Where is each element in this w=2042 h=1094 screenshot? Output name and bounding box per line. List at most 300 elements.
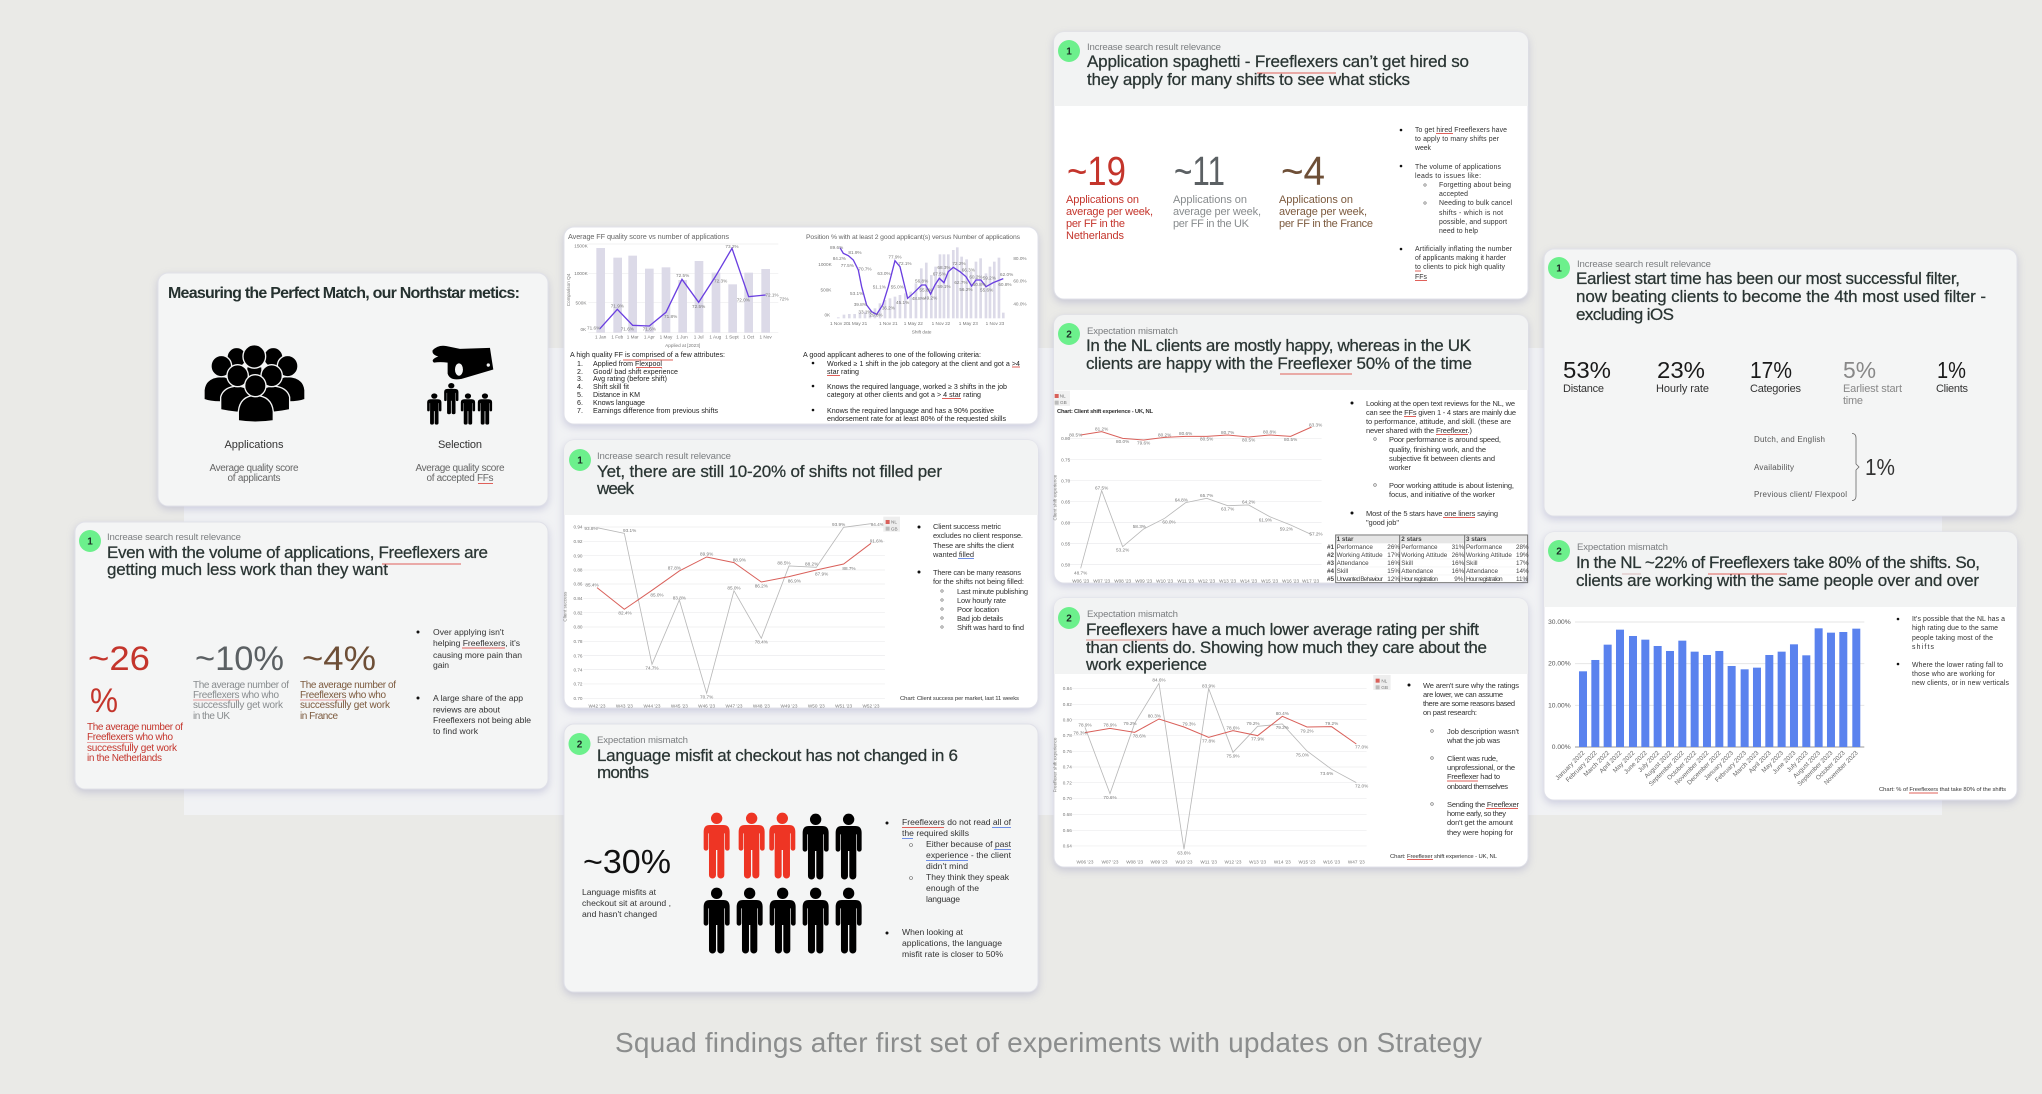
table: reasons by star rating: Skill <box>1337 568 1348 575</box>
bullets: shifts - which is not <box>1439 210 1503 217</box>
label: applications <box>210 439 299 484</box>
line chart: freeflexer shift experience: 70.6% <box>1103 795 1117 800</box>
line chart: freeflexer shift experience: 78.6% <box>1226 725 1240 730</box>
panel: freeflexer ratings <box>1053 598 1528 867</box>
stat: UK 11: per FF in the UK <box>1173 218 1250 230</box>
chart: client shift experience: 60.0% <box>1162 519 1176 524</box>
table: reasons by star rating: 14% <box>1516 568 1529 575</box>
stat: earliest start time: 5% <box>1843 357 1876 383</box>
chart: client shift experience: 0.50 <box>1061 562 1071 567</box>
chart: client shift experience: 67.5% <box>1095 486 1108 491</box>
chart: average FF quality score vs applications: 71.6% <box>587 325 600 330</box>
panel: earliest start time filter <box>1544 249 2017 516</box>
chart: client shift experience: 81.2% <box>1095 427 1108 432</box>
stat: clients: 1% <box>1937 357 1966 383</box>
text: good applicant criteria: Knows the required language, worked ≥ 3 shifts in the job <box>827 383 1007 391</box>
text: high quality FF attributes: Good/ bad shift experience <box>593 368 678 376</box>
heading: Yet, there are still 10-20% of shifts not filled per <box>597 462 942 481</box>
chart: positions with good applicants vs applications: 56.8% <box>915 278 928 283</box>
chart: average FF quality score vs applications: 1 Aug <box>709 335 722 340</box>
text: high quality FF attributes: 2. <box>577 368 583 376</box>
chart: average FF quality score vs applications: 1 Jun <box>676 335 688 340</box>
chart: average FF quality score vs applications: 71.6% <box>643 327 656 332</box>
stat: distance <box>1563 357 1611 395</box>
icon: hand selecting a person <box>427 346 493 425</box>
chart: average FF quality score vs applications: 1 Nov <box>760 335 772 340</box>
chart: client shift experience: 64.2% <box>1242 500 1255 505</box>
line chart: freeflexer shift experience: 79.2% <box>1276 725 1289 730</box>
bullets: Freeflexers do not read all of <box>902 817 1012 827</box>
category label: Increase search result relevance <box>107 532 241 543</box>
chart: positions with good applicants vs applications: 1 Nov 22 <box>932 321 951 326</box>
bullets: never shared with the Freeflexer.) <box>1366 426 1472 435</box>
table: reasons by star rating: 3 stars <box>1466 536 1487 543</box>
line chart: freeflexer shift experience: W09 '23 <box>1151 859 1168 864</box>
stat: UK 10%: The average number of <box>193 680 289 691</box>
chart: client shift experience: 0.70 <box>1061 478 1071 483</box>
chart: average FF quality score vs applications: 1 Oct <box>743 335 755 340</box>
heading: northstar metrics: Measuring the Perfect Match, our Northstar metics: <box>168 285 520 302</box>
badge 2: 2 <box>1066 614 1072 624</box>
table: reasons by star rating: 17% <box>1387 552 1400 559</box>
line chart: client success per market: 93.8% <box>584 526 598 531</box>
line chart: client success per market: Client success <box>563 591 568 622</box>
bullets: causing more pain than <box>433 650 522 660</box>
heading: they apply for many shifts to see what sticks <box>1087 70 1410 89</box>
table: reasons by star rating: Skill <box>1401 560 1413 567</box>
badge 1: 1 <box>1556 264 1562 274</box>
bullets: Bad job details <box>957 614 1003 623</box>
line chart: freeflexer shift experience: 0.76 <box>1063 749 1072 754</box>
grouped filters with bracket: Availability <box>1754 463 1794 472</box>
stat: Netherlands 19: average per week, <box>1066 206 1153 218</box>
chart: average FF quality score vs applications: Average FF quality score vs number of applications <box>568 232 729 241</box>
text: high quality FF attributes <box>570 351 725 415</box>
bar chart: share of freeflexers: December 2022 <box>1686 749 1723 787</box>
line chart: client success per market: W49 '23 <box>781 704 798 709</box>
chart: average FF quality score vs applications: 1 May <box>660 335 673 340</box>
panel: shifts not filled <box>563 440 1038 709</box>
heading <box>1087 52 1469 89</box>
stat: UK 10%: in the UK <box>193 711 230 722</box>
bullets <box>1897 616 2010 687</box>
line chart: client success per market: 87.9% <box>815 571 828 576</box>
heading <box>596 462 942 498</box>
line chart: client success per market: GB <box>891 526 898 531</box>
stat: France 4%: The average number of <box>300 680 396 691</box>
chart: client shift experience: 79.6% <box>1137 441 1150 446</box>
bar chart: share of freeflexers: October 2022 <box>1666 749 1698 782</box>
line chart: freeflexer shift experience: 78.3% <box>1073 731 1087 736</box>
text: high quality FF attributes: 1. <box>577 360 583 368</box>
table: reasons by star rating: Performance <box>1401 544 1438 551</box>
chart: average FF quality score vs applications: 1 Mar <box>627 335 639 340</box>
chart: positions with good applicants vs applications: 45.1% <box>896 300 909 305</box>
line chart: freeflexer shift experience: 78.6% <box>1133 733 1146 738</box>
bullets: of applicants making it harder <box>1415 255 1507 262</box>
text: good applicant criteria: Knows the required language and has a 90% positive <box>827 407 994 415</box>
line chart: client success per market: 86.2% <box>755 584 768 589</box>
bar chart: share of freeflexers: 10.00% <box>1548 702 1571 709</box>
chart: client shift experience: 58.3% <box>1133 524 1146 529</box>
stat: Netherlands 26%: % <box>90 682 118 720</box>
chart: average FF quality score vs applications: Comparison Q4 <box>566 273 571 306</box>
bullets <box>416 627 531 736</box>
panel: less work than wanted <box>75 522 548 789</box>
chart: client shift experience: Client shift experience <box>1053 474 1058 521</box>
stat: France 4: average per week, <box>1279 206 1367 218</box>
line chart: freeflexer shift experience: 72.0% <box>1355 783 1368 788</box>
stat: Netherlands 19: Netherlands <box>1066 230 1124 242</box>
line chart: client success per market: 94.4% <box>871 522 884 527</box>
chart: positions with good applicants vs applications: 60.2% <box>969 274 983 279</box>
chart: client shift experience: 83.3% <box>1309 422 1322 427</box>
stat: hourly rate: 23% <box>1657 357 1705 383</box>
bullets: Artificially inflating the number <box>1415 246 1513 253</box>
chart: positions with good applicants vs applications: 33.1% <box>858 309 872 314</box>
chart: client shift experience: W13 '23 <box>1219 579 1237 584</box>
chart: positions with good applicants vs applications: 80.0% <box>1013 256 1027 261</box>
bullets <box>1408 681 1520 837</box>
chart: client shift experience: 61.9% <box>1259 517 1272 522</box>
chart: average FF quality score vs applications: 1 Jul <box>694 335 704 340</box>
heading: getting much less work than they want <box>107 560 388 579</box>
table: reasons by star rating: 16% <box>1387 560 1400 567</box>
heading: clients are happy with the Freeflexer 50% of the time <box>1086 354 1472 373</box>
stat: 30%: checkout sit at around , <box>582 898 671 908</box>
chart: average FF quality score vs applications: 0K <box>580 327 587 332</box>
line chart: client success per market: 0.76 <box>573 653 583 658</box>
chart: average FF quality score vs applications <box>566 232 789 348</box>
heading: week <box>596 479 634 498</box>
bullets: Needing to bulk cancel <box>1439 200 1512 207</box>
line chart: freeflexer shift experience: GB <box>1381 685 1388 690</box>
heading: clients are working with the same people over and over <box>1576 571 1979 590</box>
line chart: client success per market: 0.80 <box>573 625 583 630</box>
table: reasons by star rating: 2 stars <box>1401 536 1422 543</box>
chart: average FF quality score vs applications: 1 Jan <box>595 335 607 340</box>
chart: average FF quality score vs applications: 1 Apr <box>644 335 655 340</box>
chart: client shift experience: 0.80 <box>1061 436 1071 441</box>
chart: client shift experience: 59.2% <box>1280 526 1293 531</box>
bar chart: share of freeflexers: July 2022 <box>1637 749 1661 774</box>
badge 1: 1 <box>1066 46 1072 58</box>
bullets: on past research: <box>1423 708 1477 717</box>
chart: client shift experience: 63.7% <box>1221 506 1234 511</box>
heading: Even with the volume of applications, Freeflexers are <box>107 543 488 562</box>
line chart: freeflexer shift experience: W16 '23 <box>1323 859 1341 864</box>
text: high quality FF attributes: Distance in KM <box>593 391 640 399</box>
line chart: freeflexer shift experience: 77.8% <box>1202 738 1215 743</box>
line chart: client success per market: 0.72 <box>573 682 583 687</box>
bar chart: share of freeflexers: 0.00% <box>1552 744 1571 751</box>
category label: Expectation mismatch <box>1087 609 1178 620</box>
stat: UK 11: Applications on <box>1173 194 1247 206</box>
heading: excluding iOS <box>1576 305 1674 324</box>
line chart: client success per market: 86.9% <box>788 579 801 584</box>
chart: positions with good applicants vs applications: 1 May 23 <box>959 321 978 326</box>
bullets: helping Freeflexers, it's <box>433 638 520 648</box>
table: reasons by star rating: 15% <box>1387 568 1400 575</box>
line chart: client success per market: 0.88 <box>573 568 583 573</box>
line chart: freeflexer shift experience: W07 '23 <box>1102 859 1119 864</box>
chart caption: Chart: Freeflexer shift experience - UK, NL <box>1390 854 1498 860</box>
line chart: freeflexer shift experience: 0.82 <box>1063 702 1072 707</box>
badge 2: 2 <box>1066 330 1072 340</box>
stat: distance: 53% <box>1563 357 1611 383</box>
bar chart: share of freeflexers: August 2023 <box>1792 749 1822 780</box>
heading: Language misfit at checkout has not changed in 6 <box>597 746 958 765</box>
page caption: Squad findings after first set of experiments with updates on Strategy <box>615 1027 1482 1058</box>
chart caption: Chart: Client success per market, last 11 weeks <box>900 696 1019 702</box>
chart: client shift experience: 0.60 <box>1061 520 1071 525</box>
chart: client shift experience: 80.5% <box>1069 433 1082 438</box>
line chart: client success per market: 88.5% <box>777 561 791 566</box>
heading: than clients do. Showing how much they care about the <box>1086 638 1487 657</box>
line chart: freeflexer shift experience: 75.0% <box>1296 753 1309 758</box>
chart: average FF quality score vs applications: Applied at [2023] <box>665 343 700 348</box>
label: selection: Average quality score <box>416 463 505 474</box>
text: high quality FF attributes: Applied from Flexpool <box>593 360 662 368</box>
bullets: The volume of applications <box>1415 164 1502 171</box>
stat: hourly rate: Hourly rate <box>1656 383 1709 395</box>
bar chart: share of freeflexers: January 2023 <box>1703 749 1735 782</box>
line chart: client success per market: NL <box>891 520 897 525</box>
chart: positions with good applicants vs applications: 62.7% <box>954 280 968 285</box>
chart: positions with good applicants vs applications: 66.3% <box>962 267 975 272</box>
chart: client shift experience: 80.5% <box>1242 438 1255 443</box>
heading <box>1576 553 1980 590</box>
line chart: freeflexer shift experience <box>1053 675 1391 864</box>
text: good applicant criteria: A good applicant adheres to one of the following criteria: <box>803 351 981 359</box>
stat: Netherlands 19 <box>1066 148 1153 242</box>
line chart: client success per market: W52 '23 <box>863 704 880 709</box>
table: reasons by star rating: #3 <box>1327 560 1334 567</box>
bullets: new clients, or in new verticals <box>1912 680 2010 687</box>
table: reasons by star rating: 12% <box>1387 576 1400 583</box>
chart: positions with good applicants vs applications: 36.2% <box>882 306 895 311</box>
line chart: freeflexer shift experience: W10 '23 <box>1176 859 1193 864</box>
chart: positions with good applicants vs applications: 55.8% <box>919 288 933 293</box>
line chart: freeflexer shift experience: W06 '23 <box>1077 859 1094 864</box>
line chart: freeflexer shift experience: 83.9% <box>1202 683 1215 688</box>
line chart: client success per market: 0.74 <box>573 667 583 672</box>
table: reasons by star rating: 26% <box>1452 552 1465 559</box>
stat: categories: 17% <box>1750 357 1792 383</box>
chart: positions with good applicants vs applications: 62.0% <box>1000 272 1013 277</box>
grouped filters with bracket: Previous client/ Flexpool <box>1754 490 1847 499</box>
line chart: freeflexer shift experience: 0.84 <box>1063 686 1072 691</box>
panel: application spaghetti <box>1054 32 1528 299</box>
stat: UK 11: average per week, <box>1173 206 1261 218</box>
grouped filters with bracket: Dutch, and English <box>1754 435 1825 444</box>
chart: positions with good applicants vs applications: 84.2% <box>833 256 846 261</box>
heading: In the NL clients are mostly happy, whereas in the UK <box>1086 336 1472 355</box>
text: high quality FF attributes: A high quality FF is comprised of a few attributes: <box>570 351 725 359</box>
table: reasons by star rating: 26% <box>1387 544 1400 551</box>
chart: client shift experience: W06 '23 <box>1072 579 1090 584</box>
stat: Netherlands 19: per FF in the <box>1066 218 1125 230</box>
chart: positions with good applicants vs applications: 81.9% <box>848 250 862 255</box>
chart: positions with good applicants vs applications: 53.1% <box>850 291 863 296</box>
line chart: freeflexer shift experience: W08 '23 <box>1126 859 1144 864</box>
bullets: When looking at <box>902 927 964 937</box>
line chart: freeflexer shift experience: 77.9% <box>1251 737 1264 742</box>
line chart: client success per market: 78.4% <box>755 640 768 645</box>
line chart: freeflexer shift experience: 0.64 <box>1063 844 1072 849</box>
chart: client shift experience: 80.0% <box>1116 439 1129 444</box>
line chart: freeflexer shift experience: 0.80 <box>1063 717 1072 722</box>
bullets: Job description wasn't <box>1447 727 1520 736</box>
stat: France 4: ~4 <box>1281 148 1325 194</box>
bullets: They think they speak <box>926 872 1010 882</box>
line chart: client success per market: 0.94 <box>573 525 583 530</box>
chart: positions with good applicants vs applications: 77.9% <box>888 254 902 259</box>
bar chart: share of freeflexers: November 2022 <box>1674 749 1711 787</box>
chart: average FF quality score vs applications: 72.5% <box>676 273 689 278</box>
bullets: wanted filled <box>932 550 974 559</box>
stat: Netherlands 26%: successfully get work <box>87 743 178 754</box>
bullets: Poor working attitude is about listening, <box>1389 481 1514 490</box>
bullets: to performance, attitude, and skill. (these are <box>1366 417 1511 426</box>
chart: positions with good applicants vs applications: 67.5% <box>933 272 946 277</box>
bullets: Forgetting about being <box>1439 182 1511 189</box>
chart: positions with good applicants vs applications: 0K <box>824 313 831 318</box>
line chart: client success per market: 0.84 <box>573 596 583 601</box>
chart: average FF quality score vs applications: 72.5% <box>692 304 705 309</box>
chart: client shift experience: 53.2% <box>1116 547 1129 552</box>
bar chart: share of freeflexers: September 2023 <box>1796 749 1835 788</box>
stat: France 4 <box>1279 148 1373 230</box>
chart: client shift experience: 80.5% <box>1200 437 1213 442</box>
stat: 30%: Language misfits at <box>582 887 657 897</box>
bullets: week <box>1414 145 1432 152</box>
line chart: client success per market: 85.0% <box>727 585 741 590</box>
line chart: client success per market: 87.8% <box>668 565 681 570</box>
bar chart: share of freeflexers: June 2022 <box>1623 749 1649 776</box>
badge 2 <box>1548 540 1570 562</box>
line chart: freeflexer shift experience: 78.9% <box>1103 723 1117 728</box>
chart: positions with good applicants vs applications: 40.0% <box>1013 301 1027 306</box>
line chart: freeflexer shift experience: 79.2% <box>1325 721 1338 726</box>
stat: 30% <box>582 843 671 919</box>
stat: Netherlands 26% <box>87 640 183 764</box>
bar chart: share of freeflexers: January 2022 <box>1554 749 1587 782</box>
bar chart: share of freeflexers: February 2023 <box>1714 749 1748 784</box>
bullets: don't get the amount <box>1447 818 1514 827</box>
table: reasons by star rating <box>1327 535 1529 583</box>
chart: positions with good applicants vs applications: 72.1% <box>898 261 912 266</box>
stat: Netherlands 19: Applications on <box>1066 194 1139 206</box>
heading <box>597 746 958 782</box>
badge 2 <box>1058 323 1080 345</box>
chart: average FF quality score vs applications: 73.2% <box>725 244 739 249</box>
chart: client shift experience: 80.8% <box>1263 430 1276 435</box>
table: reasons by star rating: 31% <box>1452 544 1465 551</box>
chart: client shift experience: W08 '23 <box>1114 579 1132 584</box>
bullets: enough of the <box>926 883 979 893</box>
bullets: Poor location <box>957 605 999 614</box>
bullets: It's possible that the NL has a <box>1912 616 2005 623</box>
chart: average FF quality score vs applications: 1 Sept <box>725 335 739 340</box>
heading: now beating clients to become the 4th most used filter - <box>1576 287 1986 306</box>
chart: average FF quality score vs applications: 72.3% <box>714 278 727 283</box>
line chart: freeflexer shift experience: 79.2% <box>1300 729 1314 734</box>
table: reasons by star rating: 1 star <box>1337 536 1354 543</box>
bullets: These are shifts the client <box>933 541 1015 550</box>
bullets: Low hourly rate <box>957 596 1006 605</box>
chart: positions with good applicants vs applications: 77.5% <box>841 263 854 268</box>
bullets: to apply to many shifts per <box>1415 136 1500 143</box>
line chart: client success per market: W45 '23 <box>671 704 688 709</box>
bullets: accepted <box>1439 191 1468 198</box>
chart: average FF quality score vs applications: 71.8% <box>664 314 677 319</box>
stat: UK 10%: successfully get work <box>193 700 284 711</box>
stat: France 4% <box>300 640 396 722</box>
text: good applicant criteria: Worked ≥ 1 shift in the job category at the client and got a >4 <box>827 360 1020 368</box>
chart: average FF quality score vs applications: 71.6% <box>621 327 634 332</box>
bullets: they were hoping for <box>1447 828 1514 837</box>
table: reasons by star rating: 9% <box>1454 576 1464 583</box>
label: applications: of applicants <box>228 473 280 484</box>
chart: average FF quality score vs applications: 72% <box>779 297 789 302</box>
chart: positions with good applicants vs applications: 1 Nov 20 <box>830 321 849 326</box>
grouped filters with bracket: 1% <box>1865 454 1895 480</box>
bullets: shifts <box>1912 644 1935 651</box>
chart: client shift experience: 57.2% <box>1309 532 1323 537</box>
line chart: freeflexer shift experience: 75.9% <box>1226 753 1240 758</box>
bar chart: share of freeflexers: April 2023 <box>1748 749 1773 775</box>
chart: positions with good applicants vs applications: 56.2% <box>959 287 973 292</box>
badge 1: 1 <box>87 536 93 548</box>
line chart: freeflexer shift experience: 0.68 <box>1063 812 1072 817</box>
chart: average FF quality score vs applications: 1500K <box>574 244 589 249</box>
chart: positions with good applicants vs applications: 500K <box>821 288 832 293</box>
table: reasons by star rating: 11% <box>1516 576 1529 583</box>
line chart: client success per market: 88.9% <box>733 557 746 562</box>
line chart: freeflexer shift experience: 0.72 <box>1063 780 1072 785</box>
grouped filters with bracket <box>1754 434 1895 500</box>
chart: client shift experience: 80.6% <box>1179 431 1192 436</box>
line chart: freeflexer shift experience: W12 '23 <box>1225 859 1242 864</box>
line chart: client success per market: 93.1% <box>623 528 636 533</box>
bullets: There can be many reasons <box>933 568 1021 577</box>
bullets: Looking at the open text reviews for the NL, we <box>1366 399 1515 408</box>
label: selection: of accepted FFs <box>426 473 494 484</box>
table: reasons by star rating: Attendance <box>1401 568 1434 575</box>
line chart: freeflexer shift experience: Freeflexer shift experience <box>1053 737 1058 792</box>
chart: client shift experience: W09 '23 <box>1135 579 1153 584</box>
line chart: client success per market: 0.92 <box>573 539 583 544</box>
bar chart: share of freeflexers: February 2022 <box>1565 749 1599 784</box>
stat: earliest start time: Earliest start <box>1843 383 1902 395</box>
text: high quality FF attributes: Knows language <box>593 399 645 407</box>
bar chart: share of freeflexers <box>1548 619 1864 788</box>
stat: categories: Categories <box>1750 383 1802 395</box>
bullets: home early, so they <box>1447 809 1506 818</box>
stat: France 4: per FF in the France <box>1279 218 1373 230</box>
text: good applicant criteria: endorsement rate for at least 80% of the requested skills <box>827 415 1006 423</box>
bullets: language <box>926 894 960 904</box>
label: selection: Selection <box>438 439 482 451</box>
chart: positions with good applicants vs applications: 59.2% <box>983 276 996 281</box>
badge 2: 2 <box>577 740 583 750</box>
chart: client shift experience: 48.7% <box>1074 571 1087 576</box>
stat: Netherlands 26%: Freeflexers who who <box>87 732 173 743</box>
chart: positions with good applicants vs applications: 55.0% <box>891 284 904 289</box>
chart: positions with good applicants vs applications: Position % with at least 2 good applicant(s) versus Number of applications <box>806 234 1021 241</box>
bar chart: share of freeflexers: July 2023 <box>1786 749 1810 774</box>
